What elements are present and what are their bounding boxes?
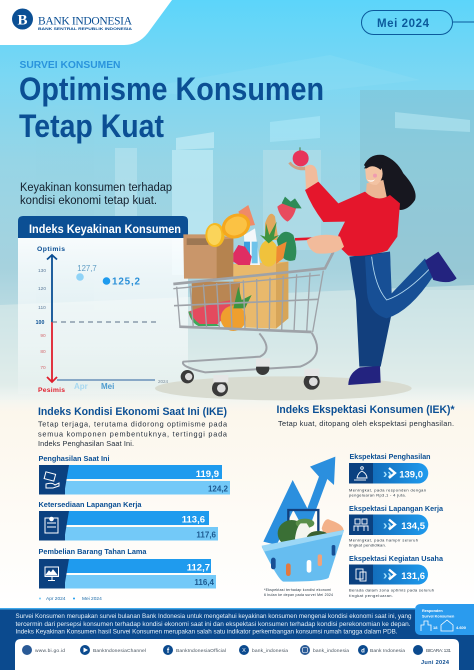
IEK item: Ekspektasi Penghasilan: Ekspektasi Penghasilan <box>350 454 430 461</box>
IKE item: Penghasilan Saat Ini <box>38 456 230 494</box>
intro text: kondisi ekonomi tetap kuat. <box>20 195 157 207</box>
IEK item: Ekspektasi Kegiatan Usaha: Berada dalam zona optimis pada seluruh <box>349 588 434 592</box>
IEK item: Ekspektasi Lapangan Kerja: Meningkat, pada hampir seluruh <box>349 538 418 542</box>
x axis labels: Apr <box>74 382 88 391</box>
woman face <box>364 161 383 185</box>
IKE legend: Mei 2024 <box>82 596 102 602</box>
y axis ticks: 80 <box>40 349 46 355</box>
bicara: BICARA: 131 <box>426 648 451 654</box>
IKE item: Ketersediaan Lapangan Kerja: 113,6 <box>182 514 205 526</box>
IEK footnote <box>264 588 333 597</box>
x axis labels <box>74 379 169 391</box>
shadow <box>155 376 412 400</box>
date pill: Mei 2024 <box>362 10 474 34</box>
apple in hand <box>288 147 309 170</box>
IKE item: Pembelian Barang Tahan Lama: 116,4 <box>194 578 215 587</box>
illustration: woman pushing shopping cart <box>155 147 457 400</box>
footer description <box>16 613 411 636</box>
IEK item: Ekspektasi Kegiatan Usaha: Ekspektasi Kegiatan Usaha <box>349 556 443 563</box>
IKE description: semua komponen pembentuknya, tertinggi pada <box>38 430 228 438</box>
IKE item: Ketersediaan Lapangan Kerja: Ketersediaan Lapangan Kerja <box>38 502 142 509</box>
data point April <box>76 264 97 281</box>
x: bank_indonesia <box>252 648 288 654</box>
strawberry <box>277 197 302 222</box>
basket handle <box>288 510 318 542</box>
respondent badge: Responden <box>422 609 443 613</box>
IKE item: Penghasilan Saat Ini: 124,2 <box>208 484 229 494</box>
logo header tab: Bank Indonesia: BANK INDONESIA <box>38 16 133 28</box>
title: Optimisme Konsumen <box>19 71 324 107</box>
website: www.bi.go.id <box>35 648 65 654</box>
date pill: Mei 2024: Mei 2024 <box>377 18 430 30</box>
IKE heading: Indeks Kondisi Ekonomi Saat Ini (IKE) <box>38 406 227 418</box>
IKE description: Tetap terjaga, terutama didorong optimisme pada <box>38 420 228 428</box>
tiktok: Bank Indonesia <box>370 648 405 654</box>
respondent badge <box>415 604 474 635</box>
chart header: Indeks Keyakinan Konsumen <box>29 224 181 236</box>
logo header tab: Bank Indonesia: B <box>17 12 28 28</box>
cart wheels <box>181 358 320 396</box>
IEK item: Ekspektasi Penghasilan: 139,0 <box>399 470 423 480</box>
data point April: 127,7 <box>77 264 97 273</box>
youtube: BankIndonesiaChannel <box>93 648 146 654</box>
groceries <box>278 519 343 558</box>
instagram <box>300 645 349 655</box>
footer band <box>0 604 474 670</box>
IEK item: Ekspektasi Lapangan Kerja <box>349 506 443 548</box>
IEK footnote: 6 bulan ke depan pada survei Mei 2024 <box>264 593 333 597</box>
footer date: Juni 2024 <box>421 660 450 666</box>
y axis ticks: 130 <box>38 268 46 274</box>
intro text <box>20 182 172 207</box>
IKE description: Indeks Penghasilan Saat Ini. <box>38 439 134 448</box>
y axis ticks: 110 <box>38 305 46 311</box>
woman hair back <box>364 155 416 210</box>
illustration: rising arrow and grocery basket <box>262 457 344 582</box>
panel: Indeks Keyakinan Konsumen chart <box>18 216 188 394</box>
x: X <box>242 648 246 654</box>
IEK footnote: *Ekspektasi terhadap kondisi ekonomi <box>264 588 331 592</box>
logo header tab: Bank Indonesia: BANK SENTRAL REPUBLIK INDONESIA <box>38 27 132 31</box>
IEK item: Ekspektasi Lapangan Kerja: Ekspektasi Lapangan Kerja <box>349 506 443 513</box>
instagram: bank_indonesia <box>313 648 349 654</box>
x axis labels: Mei <box>101 382 114 391</box>
IEK item: Ekspektasi Kegiatan Usaha: tingkat pengeluaran. <box>349 593 393 598</box>
raised hand <box>305 165 318 189</box>
footer description: Survei Konsumen merupakan survei bulanan Bank Indonesia untuk mengetahui keyakinan konsumen mengenai kondisi ekonomi saat ini, yang <box>16 613 411 620</box>
title: Tetap Kuat <box>19 108 164 144</box>
chart header <box>18 216 188 238</box>
IEK item: Ekspektasi Lapangan Kerja: 134,5 <box>401 521 426 532</box>
IKE item: Ketersediaan Lapangan Kerja <box>38 502 218 540</box>
respondent badge: 4.600 <box>456 625 467 630</box>
hand on cart handle <box>295 235 344 254</box>
IKE item: Penghasilan Saat Ini: Penghasilan Saat Ini <box>38 456 110 463</box>
intro text: Keyakinan konsumen terhadap <box>20 182 172 194</box>
IEK item: Ekspektasi Penghasilan: Meningkat, pada responden dengan <box>349 488 426 492</box>
tiktok <box>358 645 405 655</box>
footer description: tercermin dari persepsi konsumen terhadap kondisi ekonomi saat ini dan ekspektasi konsumen terhadap kondisi perekonomian ke depan. <box>16 621 411 628</box>
woman standing leg and foot <box>348 252 392 385</box>
IKE item: Ketersediaan Lapangan Kerja: 117,6 <box>196 530 217 540</box>
facebook: f <box>167 648 170 655</box>
IEK item: Ekspektasi Penghasilan: pengeluaran Rp3,1 - 4 juta. <box>349 492 406 498</box>
y axis ticks: 90 <box>40 333 46 339</box>
facebook <box>163 645 226 655</box>
woman neck <box>366 180 387 203</box>
IKE legend <box>39 596 102 602</box>
youtube <box>80 645 146 655</box>
IEK item: Ekspektasi Lapangan Kerja: ›› <box>383 518 392 532</box>
woman bent leg and foot <box>365 252 457 318</box>
tiktok: d <box>361 648 365 654</box>
x axis labels: 2024 <box>158 379 169 384</box>
IKE item: Pembelian Barang Tahan Lama: 112,7 <box>187 562 210 574</box>
axis labels optimis and pesimis: Pesimis <box>38 387 65 394</box>
shopping cart frame <box>173 252 333 372</box>
IKE item: Penghasilan Saat Ini: 119,9 <box>196 469 219 480</box>
facebook: BankIndonesiaOfficial <box>176 648 226 654</box>
section: IKE <box>38 406 230 602</box>
IEK item: Ekspektasi Kegiatan Usaha: ›› <box>383 568 392 582</box>
website <box>22 645 65 655</box>
axis labels optimis and pesimis <box>37 246 65 394</box>
woman red sweater <box>305 182 400 256</box>
y axis ticks: 70 <box>40 365 46 371</box>
bicara <box>413 645 451 655</box>
IEK item: Ekspektasi Penghasilan: ›› <box>383 466 392 481</box>
IKE description <box>38 420 228 448</box>
y axis ticks: 100 <box>36 320 44 326</box>
y axis ticks: 120 <box>38 286 46 292</box>
IEK item: Ekspektasi Penghasilan <box>349 454 430 498</box>
rising arrow <box>263 457 335 545</box>
data point Mei: 125,2 <box>112 276 141 288</box>
x <box>239 645 288 655</box>
IEK heading: Indeks Ekspektasi Konsumen (IEK)* <box>276 404 455 416</box>
optimistic axis arrow <box>47 255 57 322</box>
IEK item: Ekspektasi Lapangan Kerja: tingkat pendidikan. <box>349 542 386 548</box>
IKE item: Pembelian Barang Tahan Lama: Pembelian Barang Tahan Lama <box>38 549 147 556</box>
cart contents <box>183 205 296 331</box>
contact panel <box>15 639 459 670</box>
section: IEK <box>262 404 455 598</box>
IEK subtitle: Tetap kuat, ditopang oleh ekspektasi penghasilan. <box>278 419 454 428</box>
IEK item: Ekspektasi Kegiatan Usaha <box>349 556 443 598</box>
IKE item: Pembelian Barang Tahan Lama <box>38 549 216 588</box>
respondent badge: Survei Konsumen <box>422 614 455 618</box>
eyebrow heading: SURVEI KONSUMEN <box>20 60 120 71</box>
pessimistic axis arrow <box>47 322 57 382</box>
basket <box>262 530 344 582</box>
IKE legend: Apr 2024 <box>46 596 66 602</box>
y axis ticks <box>36 268 46 371</box>
IEK item: Ekspektasi Kegiatan Usaha: 131,6 <box>401 571 425 582</box>
footer description: Indeks Keyakinan Konsumen hasil Survei Konsumen merupakan salah satu indikator perkembangan konsumsi rumah tangga dalam PDB. <box>16 628 398 636</box>
respondent badge: 18 <box>433 625 438 630</box>
axis labels optimis and pesimis: Optimis <box>37 246 65 253</box>
title <box>19 71 324 144</box>
logo header tab: Bank Indonesia <box>0 0 172 45</box>
